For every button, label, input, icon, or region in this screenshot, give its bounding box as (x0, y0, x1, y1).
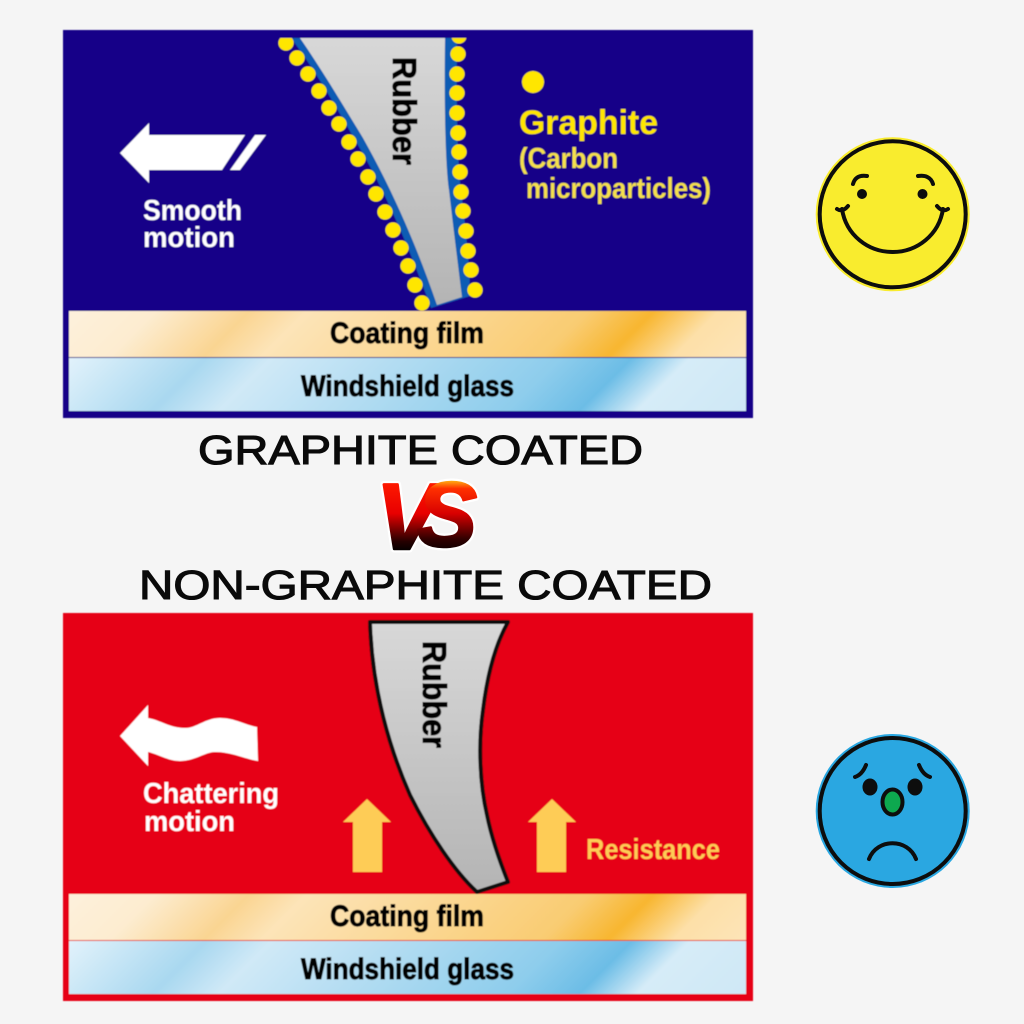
label: smooth motion: Smooth (143, 195, 242, 227)
label: chattering motion: motion (144, 806, 235, 838)
coating film band: Coating film (330, 317, 484, 350)
vs badge: S (417, 464, 477, 566)
icon: chattering motion arrow (120, 705, 258, 766)
icon: happy face (816, 137, 970, 291)
label: smooth motion (143, 195, 242, 254)
vs badge: V (376, 464, 445, 569)
windshield glass band (69, 941, 746, 994)
legend: graphite: (Carbon (519, 143, 618, 175)
windshield glass band: Windshield glass (301, 953, 514, 986)
panel: non-graphite coated (63, 613, 753, 1001)
heading: graphite coated: GRAPHITE COATED (198, 427, 643, 473)
icon: resistance arrows (343, 799, 576, 872)
rubber label: Rubber (386, 57, 423, 165)
coating film band: Coating film (330, 900, 484, 933)
label: chattering motion: Chattering (143, 778, 279, 810)
label: smooth motion: motion (143, 222, 235, 254)
vs badge: V (376, 464, 445, 569)
legend: graphite: microparticles) (526, 173, 711, 205)
rubber label: Rubber (416, 641, 453, 748)
rubber blade with graphite layer (278, 28, 483, 311)
label: chattering motion (143, 778, 279, 838)
vs badge (376, 464, 477, 569)
label: resistance: Resistance (586, 834, 720, 866)
legend: graphite: Graphite (519, 104, 658, 142)
coating film band (69, 311, 746, 357)
windshield glass band: Windshield glass (301, 370, 514, 403)
windshield glass band (69, 358, 746, 411)
heading: non-graphite coated: NON-GRAPHITE COATED (139, 562, 712, 608)
vs badge: S (417, 464, 477, 566)
rubber blade (370, 622, 508, 892)
coating film band (69, 894, 746, 940)
icon: sad face (816, 734, 970, 888)
panel: graphite coated (63, 28, 753, 418)
icon: smooth motion arrow (120, 123, 266, 183)
legend: graphite (519, 71, 711, 205)
graphite particles (278, 28, 483, 311)
